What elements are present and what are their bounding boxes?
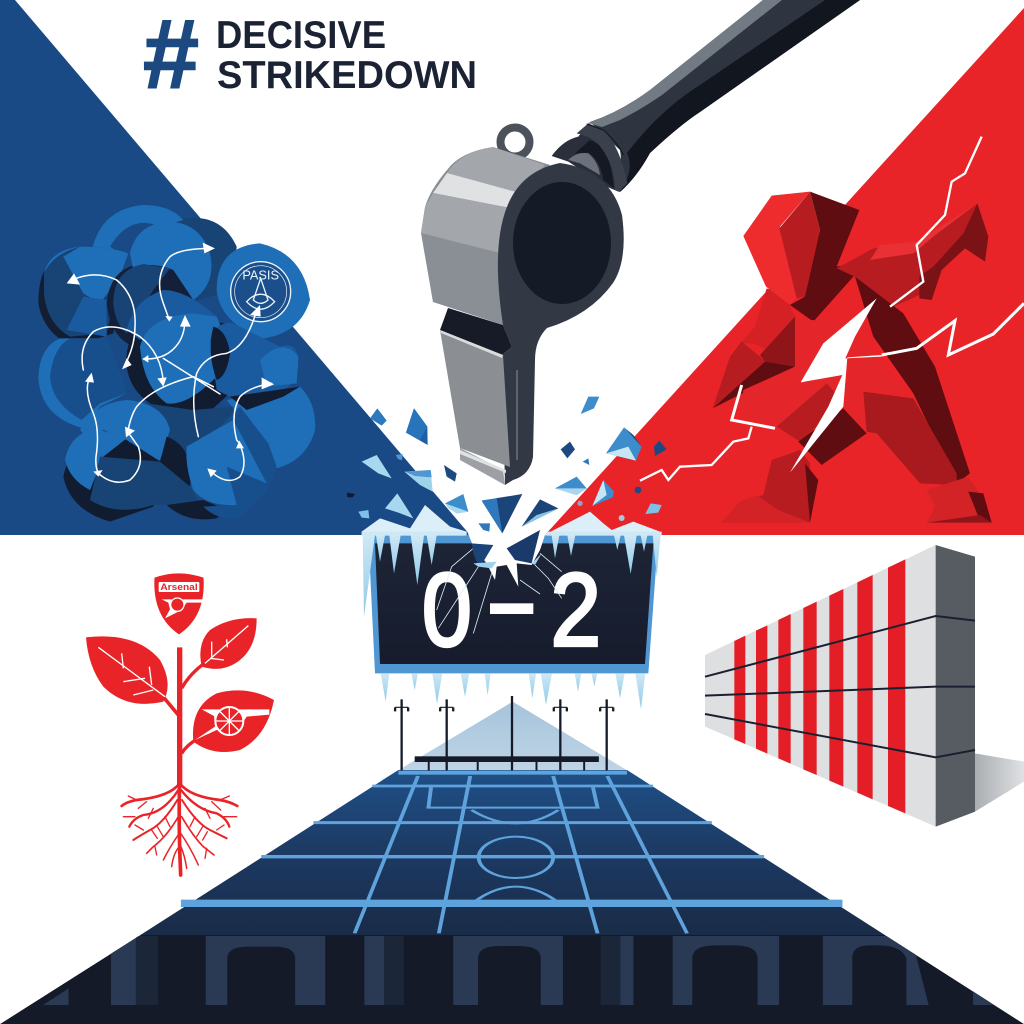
- badge: PSG crest: PASIS: [242, 267, 279, 282]
- stem: [162, 647, 207, 787]
- leaf with cannon: [193, 690, 274, 752]
- roots: [122, 777, 237, 875]
- pitch surface: [140, 770, 885, 935]
- ice shards: [347, 397, 667, 533]
- board frame: [368, 535, 658, 673]
- illustration: tangled blue tactics blob with arrows: [38, 205, 315, 522]
- icicles top: [363, 535, 661, 617]
- heading line one: DECISIVE: [216, 14, 386, 57]
- body: [421, 147, 550, 325]
- pale stadium peak: [382, 702, 643, 780]
- icon: central lightning bolt: [790, 298, 882, 473]
- lower blade: [440, 330, 510, 467]
- illustration: pitch in perspective with floodlights and stands: [0, 696, 1024, 1024]
- illustration: whistle with hammer handle: [421, 0, 860, 485]
- illustration: Arsenal plant with roots: [86, 573, 274, 875]
- stadium arches: [0, 935, 1024, 1024]
- icicles bottom: [381, 673, 645, 709]
- block seams: [705, 616, 975, 757]
- neck band: [440, 308, 512, 355]
- scoreboard 0-2 with ice: [347, 397, 667, 709]
- heading line two: STRIKEDOWN: [217, 54, 477, 97]
- title: #DECISIVE STRIKEDOWN: [143, 0, 477, 109]
- badge: PSG crest: [231, 262, 291, 322]
- board face: [375, 543, 653, 664]
- top ice crust: [362, 505, 467, 535]
- cracks: [437, 548, 562, 633]
- pitch lines: [181, 773, 842, 933]
- leaf upper right: [200, 618, 257, 669]
- score: 2: [551, 551, 601, 668]
- wall front: [705, 545, 936, 827]
- floodlights: [395, 696, 613, 771]
- stand roof and posts: [415, 756, 599, 771]
- badge: Arsenal crest: Arsenal: [160, 582, 198, 592]
- score: [422, 551, 601, 668]
- ring: [500, 128, 530, 156]
- wall shadow: [936, 753, 1024, 827]
- badge: Arsenal crest: [154, 573, 204, 635]
- illustration: red polygon player with lightning: [640, 137, 1024, 523]
- leaf left: [86, 636, 168, 704]
- red stripes: [734, 559, 905, 813]
- handle collar: [552, 123, 627, 192]
- icon: hash symbol: #: [143, 0, 199, 109]
- lightning branches: [640, 137, 1024, 481]
- arrows: white tactic arrows: [73, 248, 272, 482]
- illustration: striped concrete wall: [705, 545, 1024, 827]
- panel: red triangle: [545, 8, 1024, 535]
- central break: [467, 530, 547, 587]
- handle: [588, 0, 860, 192]
- wall side: [936, 545, 975, 827]
- score: 0: [422, 551, 472, 668]
- panel: blue triangle: [0, 0, 470, 535]
- front face: [498, 163, 624, 485]
